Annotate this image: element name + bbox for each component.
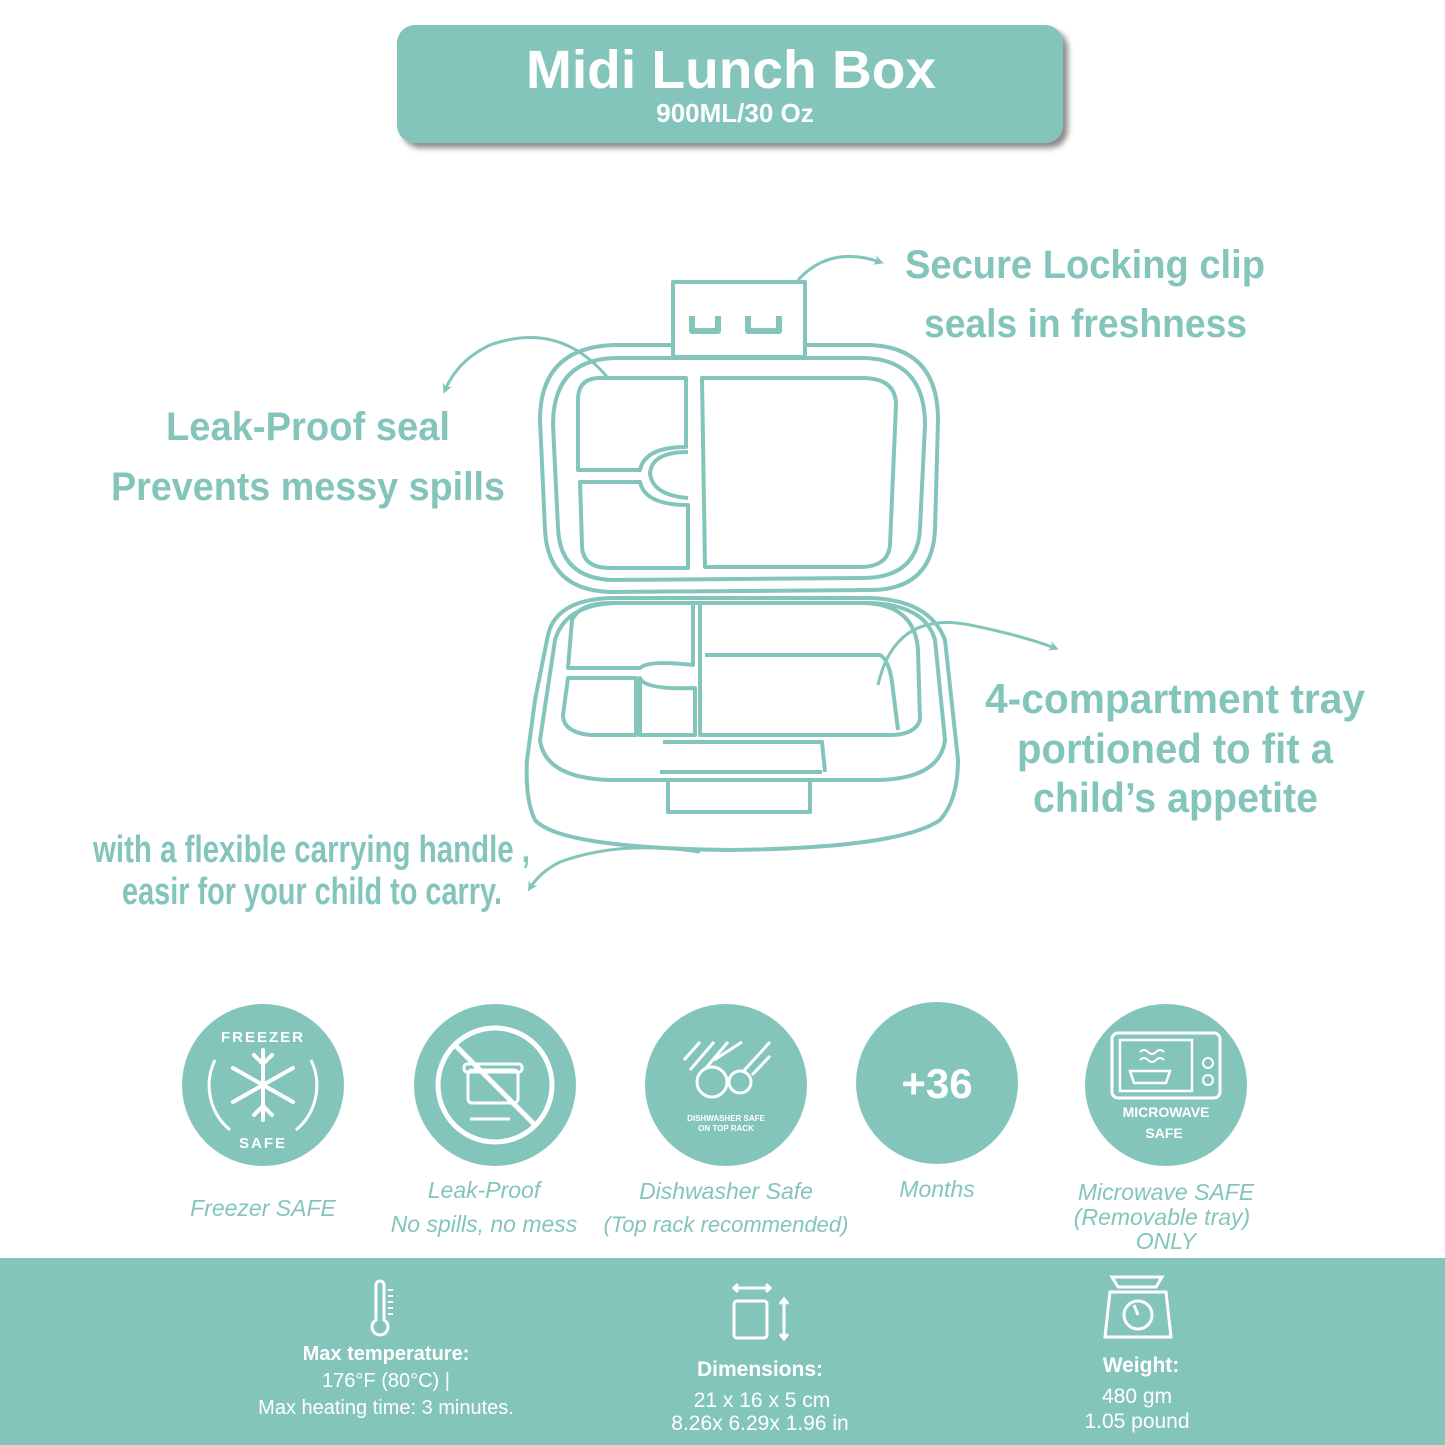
captions: No spills, no mess bbox=[391, 1211, 578, 1237]
callout: handle: with a flexible carrying handle , bbox=[92, 829, 530, 871]
bottom spec band bbox=[0, 1258, 1445, 1445]
captions: (Top rack recommended) bbox=[604, 1212, 848, 1237]
subtitle: 900ML/30 Oz bbox=[656, 98, 814, 128]
icon: thermometer bbox=[372, 1281, 393, 1335]
icon: dishwasher bbox=[645, 1004, 807, 1166]
captions: (Removable tray) bbox=[1074, 1204, 1250, 1230]
icon: microwave: MICROWAVE bbox=[1123, 1104, 1209, 1120]
captions: Freezer SAFE bbox=[190, 1195, 337, 1221]
callout: seal bbox=[111, 405, 505, 509]
callout: seal: Leak-Proof seal bbox=[166, 405, 450, 449]
callout: clip: seals in freshness bbox=[924, 302, 1247, 346]
text: dimensions: Dimensions: bbox=[697, 1358, 823, 1381]
callout: handle: easir for your child to carry. bbox=[122, 871, 502, 913]
callout: tray: child’s appetite bbox=[1033, 774, 1318, 821]
icon: freezer safe bbox=[182, 1004, 344, 1166]
icon: +36: +36 bbox=[901, 1060, 973, 1107]
icon: freezer safe: FREEZER bbox=[221, 1029, 305, 1046]
title: Midi Lunch Box bbox=[526, 40, 936, 100]
icon: +36 bbox=[856, 1002, 1018, 1164]
arrows bbox=[445, 256, 1055, 888]
callout: clip: Secure Locking clip bbox=[905, 243, 1265, 287]
callout: tray: portioned to fit a bbox=[1017, 725, 1334, 772]
lunch box illustration bbox=[527, 282, 958, 850]
text: dimensions: 8.26x 6.29x 1.96 in bbox=[671, 1412, 849, 1435]
icon: leak-proof bbox=[414, 1004, 576, 1166]
icon: dimensions bbox=[734, 1284, 788, 1339]
captions: Microwave SAFE bbox=[1078, 1179, 1255, 1205]
text: max temperature: Max heating time: 3 minutes. bbox=[258, 1397, 514, 1419]
captions bbox=[190, 1176, 1255, 1254]
callout: clip bbox=[905, 243, 1265, 346]
captions: ONLY bbox=[1136, 1228, 1198, 1254]
text: weight bbox=[1084, 1354, 1190, 1433]
arrow: clip bbox=[798, 256, 880, 280]
text: dimensions: 21 x 16 x 5 cm bbox=[694, 1389, 830, 1412]
captions: Months bbox=[899, 1176, 975, 1202]
icon: freezer safe: SAFE bbox=[239, 1135, 287, 1152]
text: max temperature bbox=[258, 1343, 514, 1419]
icon: dishwasher: DISHWASHER SAFE bbox=[687, 1114, 766, 1123]
icon: microwave: SAFE bbox=[1145, 1125, 1183, 1141]
text: max temperature: 176°F (80°C) | bbox=[322, 1370, 450, 1392]
text: weight: 1.05 pound bbox=[1084, 1410, 1190, 1433]
arrow: tray bbox=[878, 622, 1055, 685]
text: dimensions bbox=[671, 1358, 849, 1435]
arrow: handle bbox=[530, 848, 700, 888]
callout: handle bbox=[92, 829, 530, 913]
callout: tray bbox=[985, 675, 1366, 821]
callout: tray: 4-compartment tray bbox=[985, 675, 1366, 722]
icon: dishwasher: ON TOP RACK bbox=[698, 1124, 754, 1133]
text: max temperature: Max temperature: bbox=[303, 1343, 469, 1365]
callout: seal: Prevents messy spills bbox=[111, 465, 505, 509]
text: weight: 480 gm bbox=[1102, 1385, 1172, 1408]
title banner bbox=[397, 25, 1063, 143]
arrow: seal bbox=[445, 337, 608, 390]
captions: Leak-Proof bbox=[428, 1177, 543, 1203]
icon: weight scale bbox=[1105, 1277, 1171, 1337]
icon: microwave bbox=[1085, 1004, 1247, 1166]
captions: Dishwasher Safe bbox=[639, 1178, 813, 1204]
text: weight: Weight: bbox=[1103, 1354, 1179, 1377]
